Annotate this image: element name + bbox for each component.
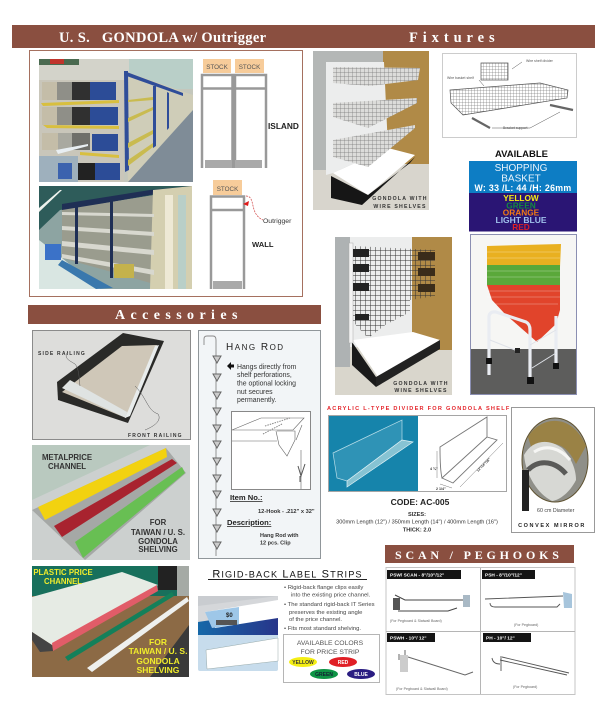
shelf boxes [39,82,120,182]
photo: side and front railing: SIDE RAILING [38,351,86,357]
diagram: island section [202,59,299,168]
panel: gondola with outrigger [30,50,302,296]
text: code and sizes: SIZES: [408,512,426,518]
photo: stack of coloured baskets on trolley [470,234,576,394]
heading: U.S. gondola: U. S. GONDOLA w/ Outrigger [59,30,267,46]
peghook: PSH: PSH - 8"/10"/12" [485,572,522,578]
diagram: island section: STOCK [239,64,261,71]
peghook: PSWH: (For Pegboard & Slatwall Board) [396,687,448,691]
text: code and sizes: THICK: 2.0 [403,528,431,534]
photo: plastic price channel [32,566,189,677]
text: label strip features: • The standard rigid-back IT Series [284,602,375,608]
panel: convex mirror: 60 cm Diameter [537,508,575,514]
text: label strip features: • Rigid-back flange clips easily [284,585,363,591]
text: code and sizes: 300mm Length (12") / 350mm Length (14") / 400mm Length (16") [336,520,498,526]
peghook: PSWH: PSWH - 10"/ 12" [390,636,427,642]
peghook: PSW / Scan: PSW/ SCAN - 8"/10"/12" [390,572,444,578]
photo: gondola with wire shelves: WIRE SHELVES [373,204,427,210]
panel: shopping basket colours [469,161,577,232]
heading: rigid-back label strips: RIGID-BACK LABEL STRIPS [212,568,363,580]
photo: plastic price channel: PLASTIC PRICE [33,568,93,577]
header bar: accessories: Accessories [115,308,243,323]
panel: shopping basket colours: GREEN [506,200,536,210]
photo: gondola with wine shelves [335,237,452,395]
diagram: wire shelf exploded view [442,54,576,138]
header bar: scan / peghooks [385,545,574,563]
peghook: PSWH [387,633,473,691]
text: label strip features [284,585,375,632]
panel: hang rod: Hangs directly from [237,364,297,371]
photo: metal price channel: METALPRICE [42,453,92,462]
panel: hang rod: 12-Hook - .212" x 32" [258,509,315,515]
diagram: island section: STOCK [206,64,229,71]
text: code and sizes: CODE: AC-005 [391,497,450,507]
heading: fixtures: Fixtures [409,30,499,46]
photo: plastic price channel: CHANNEL [44,577,82,586]
panel: hang rod [198,330,320,558]
panel: hang rod: nut secures [237,389,273,396]
diagram: wall section with outrigger: WALL [252,240,274,249]
panel: available price strip colours: AVAILABLE COLORS [297,640,364,647]
peghook: PH: PH - 10"/ 12" [486,636,515,642]
panel: hang rod: permanently. [237,397,276,404]
diagram: wall section with outrigger: STOCK [217,186,239,193]
photo: metal price channel [32,445,190,560]
diagram: wall section with outrigger: Outrigger [263,218,292,225]
panel: acrylic divider photo and drawing: 4 ¾" [430,467,438,471]
panel: available price strip colours: GREEN [315,672,333,678]
diagram: wire shelf exploded view: Bracket support [503,126,528,130]
peghook: PH: (For Pegboard) [513,685,537,689]
panel: available price strip colours: YELLOW [292,660,314,666]
panel: available price strip colours: BLUE [354,672,368,678]
header bar: accessories [28,305,321,324]
diagram: hang rod on shelf [232,412,310,490]
photo: plastic price channel: FOR [149,637,167,647]
peghook: PSW / Scan [387,570,470,623]
text: label strip features: of the price channel. [289,617,342,623]
heading: acrylic divider: ACRYLIC L-TYPE DIVIDER FOR GONDOLA SHELF [327,406,511,412]
diagram: island section: ISLAND [268,121,299,131]
heading: available: AVAILABLE [495,149,548,160]
photo: store aisle wall gondola [39,186,192,289]
text: label strip features: • Fits most standard shelving. [284,626,361,632]
text: label strip features: preserves the existing angle [289,610,363,616]
peghook: PSH: (For Pegboard) [514,623,538,627]
panel: convex mirror: CONVEX MIRROR [518,523,586,529]
panel: shopping basket colours: SHOPPING [495,163,548,174]
photo: metal price channel: SHELVING [138,545,178,554]
header bar: scan / peghooks: SCAN / PEGHOOKS [395,548,563,562]
photo: label strip sample [198,596,278,671]
panel: convex mirror [512,408,594,532]
panel: hang rod: 12 pcs. Clip [260,540,291,546]
panel: peghook grid [386,568,575,694]
text: code and sizes [336,497,498,534]
panel: hang rod: HANG ROD [226,342,285,353]
diagram: wire shelf exploded view: Wire shelf divider [526,59,554,63]
photo: gondola with wire shelves [313,51,429,210]
icon: row of clips on rod [213,356,221,549]
diagram: wire shelf exploded view: Wire basket shelf [447,76,474,80]
peghook: PSW / Scan: (For Pegboard & Slatwall Board) [390,619,442,623]
panel: hang rod: Hang Rod with [260,533,299,539]
photo: side and front railing: FRONT RAILING [128,433,183,439]
photo: gondola with wine shelves: GONDOLA WITH [393,381,449,387]
photo: label strip sample: $0 [226,613,233,619]
photo: metal price channel: TAIWAN / U. S. [131,528,185,537]
photo: metal price channel: FOR [150,518,167,527]
panel: hang rod: shelf perforations, [237,372,292,379]
photo: metal price channel: GONDOLA [138,537,178,546]
panel: acrylic divider photo and drawing: 12"/14"/16" [476,457,492,473]
peghook: PH [483,633,569,689]
panel: shopping basket colours: ORANGE [503,208,540,218]
text: label strip features: into the existing price channel. [291,592,371,598]
peghook: PSH [482,570,572,627]
header bar: U.S. Gondola and Fixtures [12,25,595,48]
panel: shopping basket colours: LIGHT BLUE [496,215,547,225]
photo: side and front railing [32,330,190,440]
photo: metal price channel: CHANNEL [48,462,86,471]
panel: shopping basket colours: YELLOW [503,193,539,203]
panel: hang rod: the optional locking [237,380,296,388]
panel: hang rod: Item No.: [230,493,262,502]
photo: plastic price channel: SHELVING [137,665,180,675]
panel: available price strip colours: RED [338,660,349,666]
panel: shopping basket colours: W: 33 /L: 44 /H: 26mm [474,183,572,193]
photo: store aisle island gondola [39,59,193,182]
panel: acrylic divider photo and drawing [328,416,506,492]
photo: gondola with wine shelves: WINE SHELVES [394,388,448,394]
photo: gondola with wire shelves: GONDOLA WITH [372,196,428,202]
panel: shopping basket colours: RED [512,222,530,232]
panel: shopping basket colours: BASKET [501,174,541,184]
panel: acrylic divider photo and drawing: 2 1/4" [436,487,446,491]
icon: arrow bullet [227,362,234,370]
photo: plastic price channel: GONDOLA [136,656,180,666]
panel: available price strip colours: FOR PRICE STRIP [301,649,360,656]
diagram: wall section with outrigger [211,180,292,289]
photo: plastic price channel: TAIWAN / U. S. [129,646,187,656]
panel: available price strip colours [284,634,380,682]
panel: hang rod: Description: [227,518,271,527]
